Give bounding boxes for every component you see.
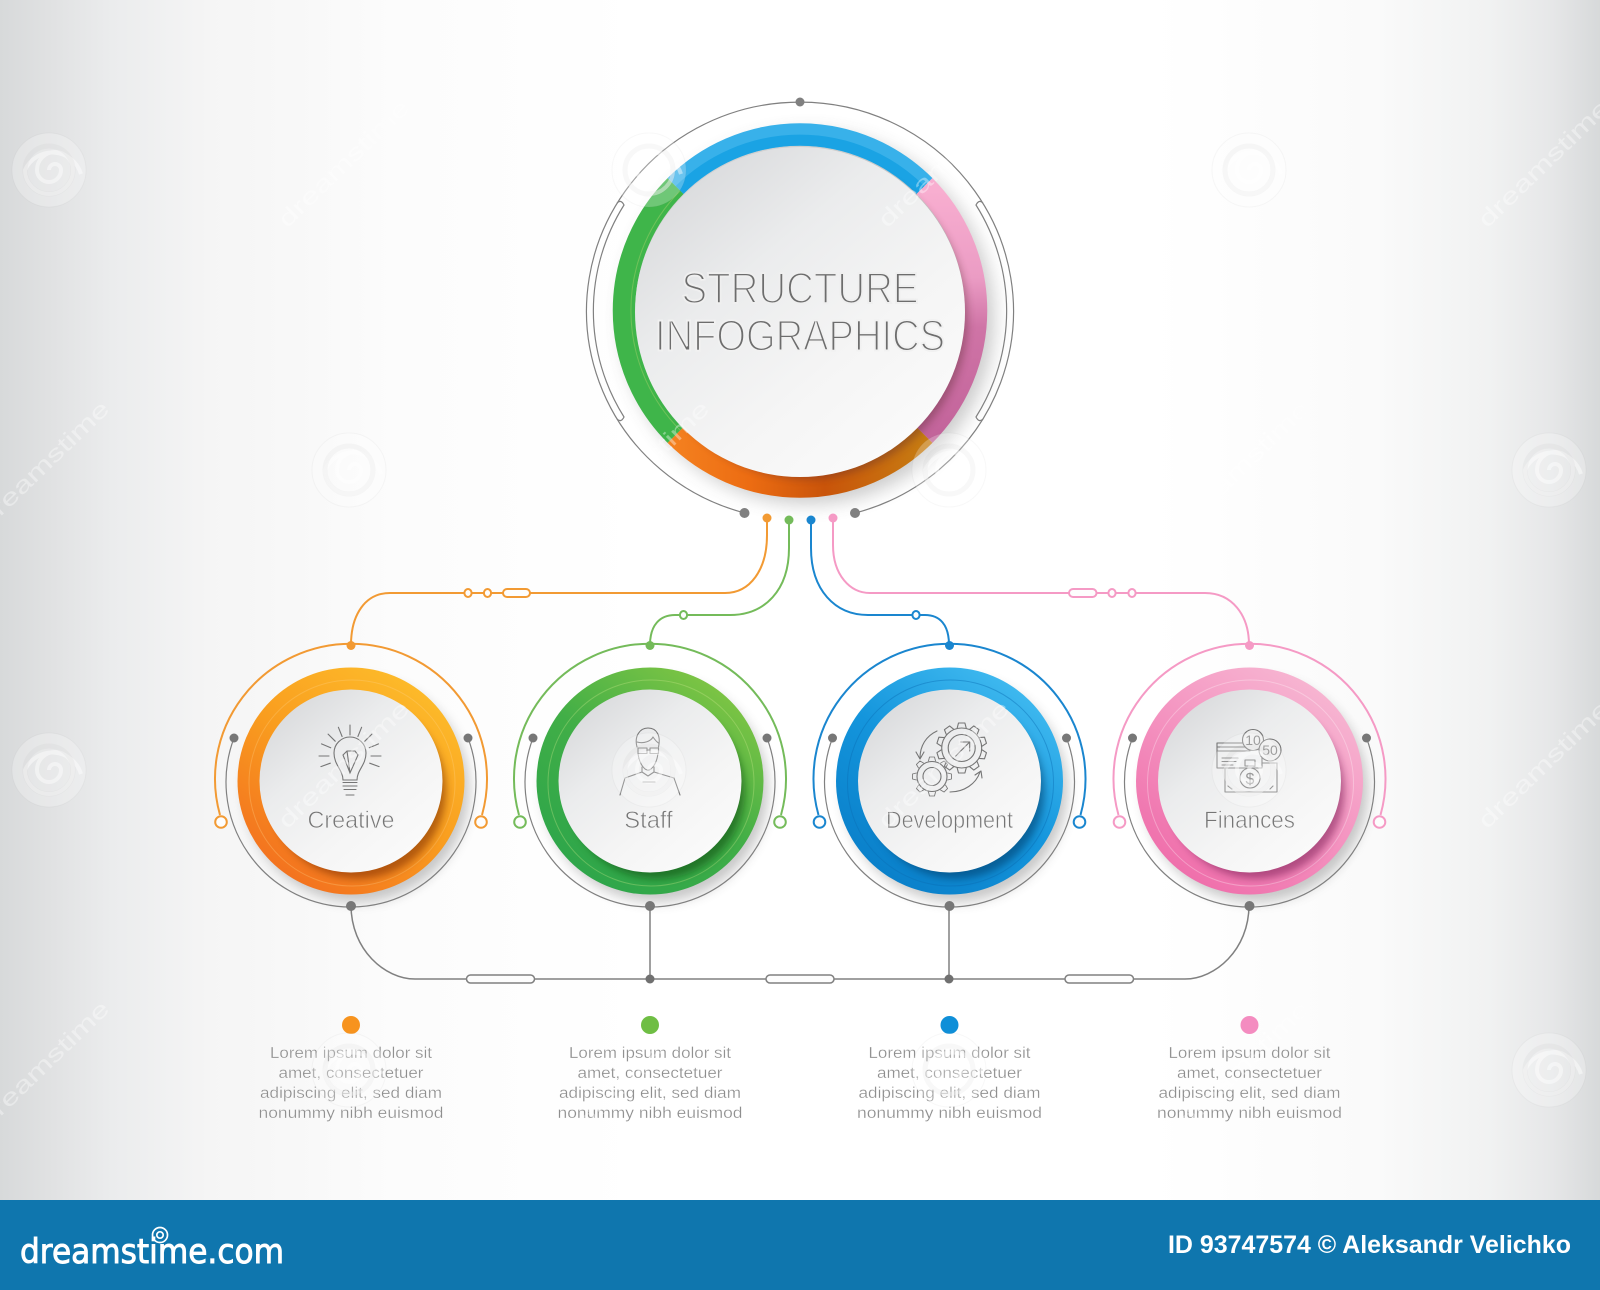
legend block: Creative: nonummy nibh euismod [258,1105,444,1122]
disc shadow on ring [277,726,450,884]
label: Finances [1204,807,1295,834]
title line 1: STRUCTURE [682,265,918,313]
legend block: Creative: amet, consectetuer [278,1065,424,1082]
watermark text: dreamstime [573,395,714,533]
footer credit: ID 93747574 © Aleksandr Velichko [1168,1231,1571,1259]
icon: person with glasses [620,728,680,795]
label: Staff [624,807,673,834]
title line 2: INFOGRAPHICS [655,312,945,360]
legend block: Creative [258,1016,444,1122]
ring segment: orange [676,435,924,486]
icon: card, banknote and coins [1217,730,1281,792]
white disc [858,690,1041,872]
central ring shadow [622,132,994,504]
grey arc [226,738,476,907]
ring shadow [245,678,469,902]
bottom grey connector bus [351,905,1249,984]
central circle [586,98,1014,518]
connector: pink [828,514,1249,645]
node: Finances [1114,641,1386,911]
white disc [558,690,742,872]
legend block: Finances: amet, consectetuer [1177,1065,1322,1082]
legend block: Development: Lorem ipsum dolor sit [868,1045,1031,1062]
ring segment: pink [924,186,976,435]
ring shadow [544,678,768,902]
legend block: Staff: amet, consectetuer [578,1065,722,1082]
footer logo spiral [152,1228,168,1242]
legend block: Creative: Lorem ipsum dolor sit [270,1045,433,1062]
node: Creative [215,641,487,911]
coloured arc [514,644,786,815]
legend block: Staff: adipiscing elit, sed diam [559,1085,741,1102]
disc shadow on ring [698,194,972,483]
watermark text: dreamstime [1473,94,1600,232]
watermark text: dreamstime [273,695,414,833]
top dot [796,98,804,106]
watermark text: dreamstime [573,995,714,1133]
legend block: Creative: adipiscing elit, sed diam [260,1085,442,1102]
watermark spirals [12,133,1586,1107]
ring stripe [848,680,1054,886]
ring stripe [249,680,455,886]
disc shadow on ring [1176,726,1350,884]
grey arc [525,738,775,907]
coloured arc [1114,644,1386,815]
legend block: Finances [1157,1016,1342,1122]
arc end markers [514,641,786,911]
legend block: Finances: adipiscing elit, sed diam [1158,1085,1340,1102]
coloured arc [814,644,1086,815]
watermark text: dreamstime [1173,995,1314,1133]
white disc [260,690,442,872]
legend block: Staff [558,1016,742,1122]
bottom right dot [850,508,860,518]
icon: card, banknote and coins: 50 [1262,742,1278,758]
connector: orange [351,514,772,645]
icon: card, banknote and coins: $ [1246,771,1255,788]
green ring [536,668,764,894]
grey arc [1124,738,1374,907]
bottom left dot [740,508,750,518]
icon: light bulb [319,725,381,795]
legend block: Finances: Lorem ipsum dolor sit [1168,1045,1331,1062]
ring segment: blue [676,135,924,190]
ring stripe [1148,680,1354,886]
pink ring [1136,668,1363,894]
arc end markers [1114,641,1385,911]
legend block: Development: amet, consectetuer [877,1065,1022,1082]
legend block: Development [857,1016,1042,1122]
footer logo: dreamstime.com [20,1232,284,1272]
disc shadow on ring [578,730,750,883]
white disc [1158,690,1341,872]
label: Creative [308,807,394,834]
watermark text: dreamstime [1173,395,1314,533]
ring shadow [844,678,1068,902]
orange ring [238,668,464,894]
watermark text: dreamstime [1473,695,1600,833]
ring stripe [548,680,754,886]
watermark text: dreamstime [873,695,1014,833]
connector: green [650,516,794,645]
legend block: Staff: nonummy nibh euismod [558,1105,742,1122]
central white disc [635,147,965,477]
watermark text: dreamstime [273,94,414,232]
node: Development [814,641,1086,911]
ring segment: green [624,186,680,435]
icon: card, banknote and coins: 10 [1245,732,1261,748]
legend block: Staff: Lorem ipsum dolor sit [569,1045,732,1062]
legend block: Development: adipiscing elit, sed diam [858,1085,1040,1102]
icon: gears with arrows [912,723,987,796]
thin outer bracket lines [586,102,1014,513]
arc end markers [215,641,487,911]
watermark text: dreamstime [873,94,1014,232]
legend block: Finances: nonummy nibh euismod [1157,1105,1342,1122]
label: Development [886,807,1013,834]
blue ring [836,668,1063,894]
disc shadow on ring [878,730,1049,883]
coloured arc [215,644,487,815]
grey arc [824,738,1074,907]
connector: blue [806,516,949,645]
legend block: Development: nonummy nibh euismod [857,1105,1042,1122]
arc end markers [814,641,1085,911]
ring shadow [1144,678,1368,902]
node: Staff [514,641,786,911]
footer bar [0,1200,1600,1290]
